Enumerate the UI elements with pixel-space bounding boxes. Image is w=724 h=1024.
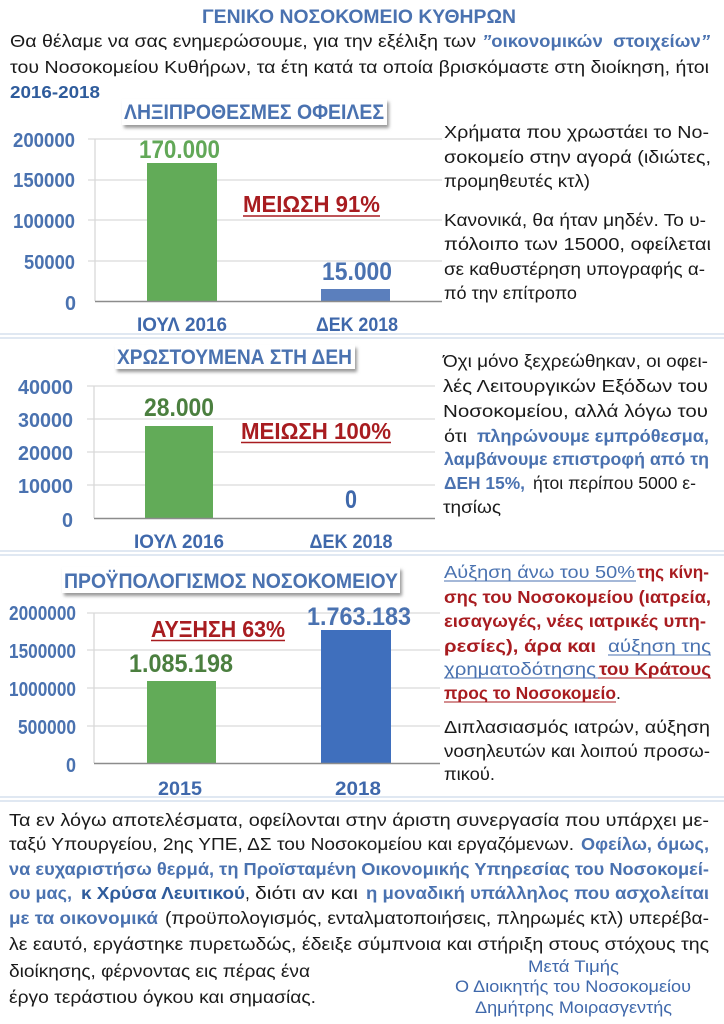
y axis and grid: 0: [62, 509, 73, 532]
category labels: [134, 531, 393, 553]
text block: budget explanation: ρεσίες), άρα και: [444, 636, 596, 656]
text block: closing acknowledgement: η μοναδική υπάλληλος που ασχολείται: [366, 883, 709, 903]
text block: budget explanation: της κίνη-: [637, 562, 709, 582]
bar: 2018: [321, 630, 391, 763]
text block: DEI explanation: πληρώνουμε εμπρόθεσμα,: [477, 426, 709, 446]
signature: Ο Διοικητής του Νοσοκομείου: [455, 978, 691, 996]
text block: budget explanation: [444, 562, 711, 784]
text block: budget explanation: προς το Νοσοκομείο: [444, 683, 616, 703]
y axis and grid: 1000000: [9, 678, 76, 701]
value: 1.085.198: 1.085.198: [129, 650, 233, 678]
value: 15.000: 15.000: [322, 258, 392, 286]
y axis and grid: 40000: [18, 376, 73, 399]
text block: closing acknowledgement: διοίκησης, φέρνοντας εις πέρας ένα: [9, 961, 310, 981]
bar: July 2016: [147, 163, 217, 301]
y axis and grid: 1500000: [9, 640, 76, 663]
panel: overdue debts chart: [13, 99, 442, 336]
category labels: [158, 778, 381, 800]
y axis and grid: 2000000: [9, 602, 76, 625]
bar: December 2018: [321, 289, 390, 301]
text block: DEI explanation: [442, 351, 709, 517]
y axis and grid: 0: [65, 292, 76, 315]
category labels: 2015: [158, 778, 202, 800]
text block: closing acknowledgement: [9, 810, 709, 1007]
intro text: ”οικονομικών στοιχείων ”: [482, 31, 710, 51]
category labels: ΙΟΥΛ 2016: [134, 531, 224, 553]
y axis and grid: 10000: [18, 475, 73, 498]
text block: closing acknowledgement: (προϋπολογισμός, ενταλματοποιήσεις, πληρωμές κτλ) υπερέβα-: [165, 908, 709, 928]
text block: budget explanation: Αύξηση άνω του 50%: [444, 562, 635, 582]
intro text: του Νοσοκομείου Κυθήρων, τα έτη κατά τα οποία βρισκόμαστε στη διοίκηση, ήτοι: [10, 57, 709, 77]
text block: closing acknowledgement: κ Χρύσα Λευιτικού: [81, 883, 245, 903]
panel: hospital budget chart: [9, 567, 440, 800]
callout: decrease 100%: ΜΕΙΩΣΗ 100%: [241, 418, 391, 444]
callout: increase 63%: ΑΥΞΗΣΗ 63%: [151, 616, 285, 642]
intro text: 2016-2018: [10, 82, 100, 102]
text block: overdue debts explanation: σοκομείο στην αγορά (ιδιώτες,: [444, 147, 711, 167]
y axis and grid: [18, 376, 435, 532]
text block: closing acknowledgement: Οφείλω, όμως,: [581, 834, 709, 854]
text block: closing acknowledgement: ταξύ Υπουργείου, 2ης ΥΠΕ, ΔΣ του Νοσοκομείου και εργαζόμενων.: [9, 834, 574, 854]
text block: overdue debts explanation: σε καθυστέρηση υπογραφής α-: [444, 259, 705, 279]
y axis and grid: 100000: [13, 210, 75, 233]
category labels: ΔΕΚ 2018: [316, 314, 398, 336]
y axis and grid: 150000: [13, 169, 75, 192]
value: 170.000: 170.000: [139, 136, 220, 164]
text block: budget explanation: νοσηλευτών και λοιπού προσω-: [444, 741, 710, 761]
signature: Μετά Τιμής: [528, 958, 619, 976]
y axis and grid: 500000: [18, 716, 76, 739]
text block: closing acknowledgement: Τα εν λόγω αποτελέσματα, οφείλονται στην άριστη συνεργασία που υπάρχει με-: [9, 810, 709, 830]
panel: owed to DEI chart: [18, 345, 435, 553]
text block: closing acknowledgement: ου μας,: [9, 883, 72, 903]
value: 0: 0: [345, 486, 357, 514]
text block: DEI explanation: Όχι μόνο ξεχρεώθηκαν, οι οφει-: [442, 351, 708, 371]
y axis and grid: 50000: [24, 251, 75, 274]
text block: DEI explanation: λές Λειτουργικών Εξόδων του: [443, 376, 708, 396]
y axis and grid: [13, 129, 442, 315]
heading: hospital budget: ΠΡΟΫΠΟΛΟΓΙΣΜΟΣ ΝΟΣΟΚΟΜΕΙΟΥ: [64, 570, 398, 593]
value: 1.763.183: 1.763.183: [307, 603, 411, 631]
text block: budget explanation: αύξηση της: [608, 636, 711, 656]
intro text: Θα θέλαμε να σας ενημερώσουμε, για την εξέλιξη των: [10, 31, 476, 51]
intro text: [10, 31, 710, 102]
text block: closing acknowledgement: να ευχαριστήσω θερμά, τη Προϊσταμένη Οικονομικής Υπηρεσίας του Νοσοκομεί-: [9, 859, 709, 879]
text block: closing acknowledgement: έργο τεράστιου όγκου και σημασίας.: [9, 987, 316, 1007]
text block: closing acknowledgement: ,: [245, 883, 250, 903]
y axis and grid: 200000: [13, 129, 75, 152]
category labels: ΔΕΚ 2018: [310, 531, 393, 553]
bar: 2015: [147, 681, 216, 763]
text block: budget explanation: χρηματοδότησης: [444, 659, 596, 679]
value: 28.000: 28.000: [144, 394, 214, 422]
text block: overdue debts explanation: Κανονικά, θα ήταν μηδέν. Το υ-: [444, 210, 706, 230]
text block: closing acknowledgement: λε εαυτό, εργάστηκε πυρετωδώς, έδειξε σύμπνοια και στήριξη στους στόχους της: [9, 934, 709, 954]
text block: overdue debts explanation: πό την επίτροπο: [444, 283, 577, 303]
category labels: 2018: [335, 778, 381, 800]
category labels: [137, 314, 398, 336]
callout: decrease 91%: ΜΕΙΩΣΗ 91%: [243, 191, 380, 217]
title: ΓΕΝΙΚΟ ΝΟΣΟΚΟΜΕΙΟ ΚΥΘΗΡΩΝ: [202, 6, 516, 28]
signature: [455, 958, 691, 1017]
text block: budget explanation: .: [616, 683, 621, 703]
text block: budget explanation: εισαγωγές, νέες ιατρικές υπη-: [444, 611, 706, 631]
text block: DEI explanation: τησίως: [443, 497, 501, 517]
category labels: ΙΟΥΛ 2016: [137, 314, 227, 336]
text block: budget explanation: σης του Νοσοκομείου (ιατρεία,: [444, 587, 711, 607]
text block: closing acknowledgement: με τα οικονομικά: [9, 908, 158, 928]
text block: closing acknowledgement: διότι αν και: [255, 883, 358, 903]
text block: overdue debts explanation: προμηθευτές κτλ): [444, 171, 590, 191]
text block: DEI explanation: Νοσοκομείου, αλλά λόγω του: [443, 401, 708, 421]
y axis and grid: 30000: [18, 409, 73, 432]
text block: budget explanation: Διπλασιασμός ιατρών, αύξηση: [444, 717, 710, 737]
text block: DEI explanation: ΔΕΗ 15%,: [444, 473, 525, 493]
text block: DEI explanation: λαμβάνουμε επιστροφή από τη: [444, 449, 709, 469]
heading: owed to DEI: ΧΡΩΣΤΟΥΜΕΝΑ ΣΤΗ ΔΕΗ: [117, 346, 352, 369]
text block: DEI explanation: ότι: [444, 426, 467, 446]
y axis and grid: [9, 602, 440, 777]
y axis and grid: 0: [66, 754, 76, 777]
text block: DEI explanation: ήτοι περίπου 5000 ε-: [533, 473, 696, 493]
text block: overdue debts explanation: [444, 122, 711, 303]
heading: overdue debts: ΛΗΞΙΠΡΟΘΕΣΜΕΣ ΟΦΕΙΛΕΣ: [124, 101, 384, 124]
text block: budget explanation: πικού.: [444, 764, 495, 784]
text block: budget explanation: του Κράτους: [599, 659, 711, 679]
text block: overdue debts explanation: πόλοιπο των 15000, οφείλεται: [444, 234, 711, 254]
text block: overdue debts explanation: Χρήματα που χρωστάει το Νο-: [444, 122, 709, 142]
bar: July 2016: [145, 426, 213, 518]
signature: Δημήτρης Μοιρασγεντής: [475, 999, 672, 1017]
y axis and grid: 20000: [18, 442, 73, 465]
